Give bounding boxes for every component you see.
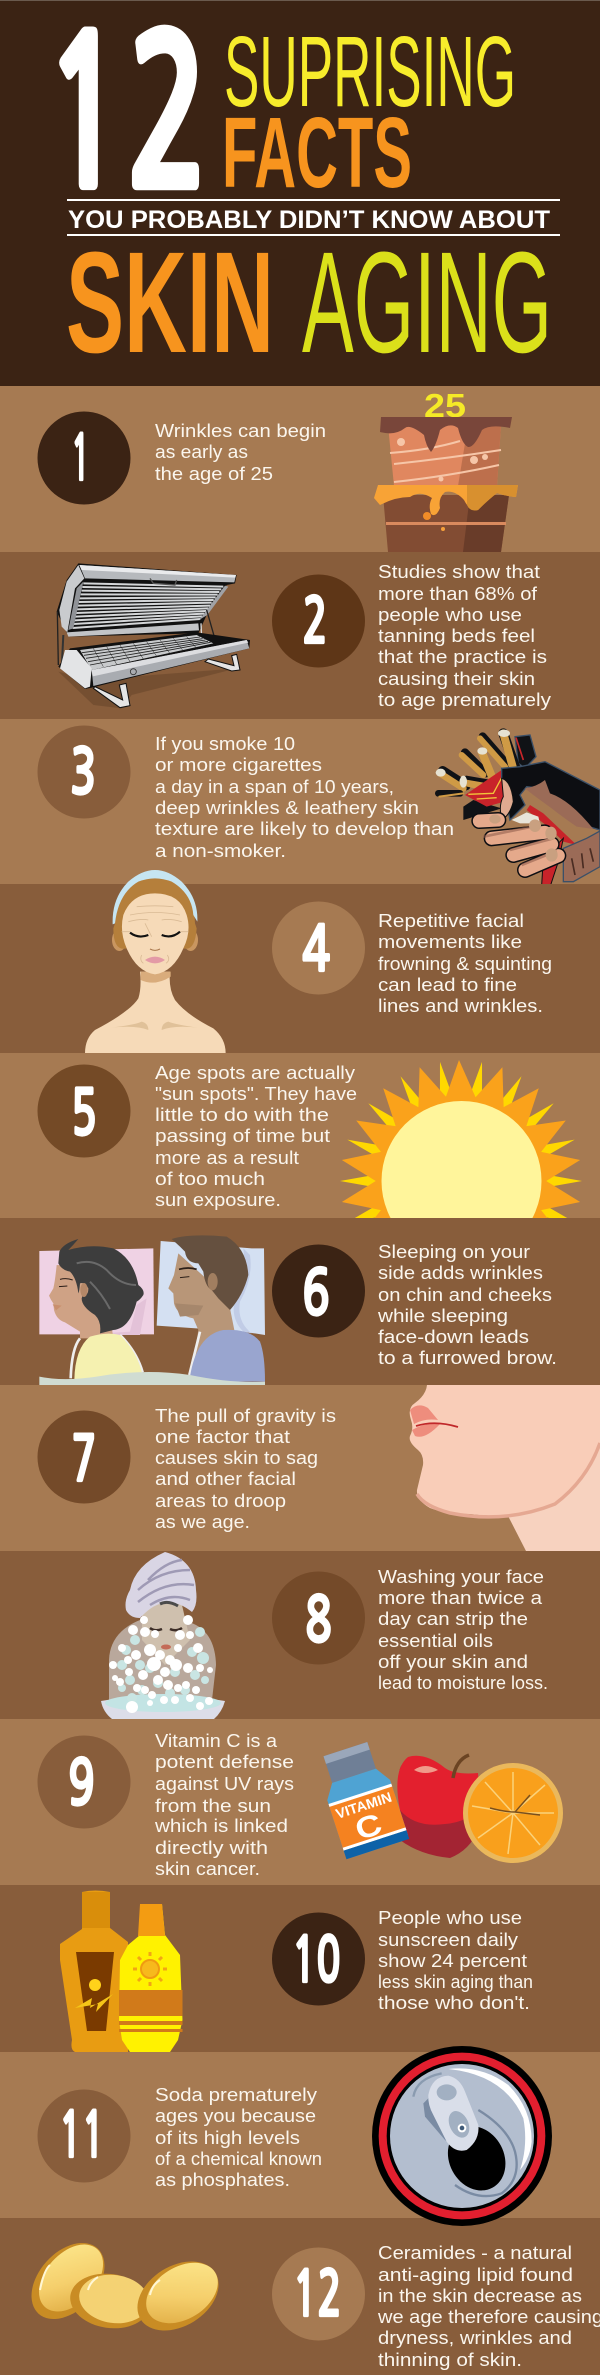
number badge 10 xyxy=(272,1912,365,2006)
number badge 12 xyxy=(272,2248,365,2340)
text: fact 10: People who use xyxy=(378,1907,522,1928)
text: fact 7: one factor that xyxy=(155,1426,290,1447)
illustration: woman washing face xyxy=(101,1552,225,1719)
number badge 7: 7 xyxy=(72,1430,96,1491)
text: fact 1: as early as xyxy=(155,441,248,462)
number badge 11: 11 xyxy=(59,2106,104,2167)
number badge 11 xyxy=(38,2090,130,2182)
number badge 1: 1 xyxy=(71,429,90,490)
text: fact 5: of too much xyxy=(155,1168,265,1189)
title word: facts: FACTS xyxy=(222,97,412,209)
icon: birthday cake: 25 xyxy=(424,387,466,424)
text: fact 11: Soda prematurely xyxy=(155,2084,318,2105)
text: fact 12: we age therefore causing xyxy=(377,2306,600,2327)
text: fact 4: Repetitive facial xyxy=(378,910,524,931)
number badge 5: 5 xyxy=(71,1084,97,1145)
text: fact 10: show 24 percent xyxy=(378,1950,527,1971)
text: fact 4 xyxy=(378,910,552,1016)
subtitle with rules: YOU PROBABLY DIDN’T KNOW ABOUT xyxy=(68,206,550,234)
text: fact 10 xyxy=(378,1907,533,2013)
panel: fact 6 xyxy=(0,1218,600,1385)
text: fact 2: Studies show that xyxy=(378,561,540,582)
text: fact 2: that the practice is xyxy=(378,646,547,667)
text: fact 9: skin cancer. xyxy=(155,1858,260,1879)
icon: vitamin c bottle, apple and orange: C xyxy=(351,1808,386,1847)
text: fact 6: face-down leads xyxy=(378,1326,529,1347)
icon: sun xyxy=(340,1060,582,1218)
text: fact 8: Washing your face xyxy=(378,1566,544,1587)
text: fact 3: texture are likely to develop than xyxy=(155,818,454,839)
title word: skin: SKIN xyxy=(66,222,274,383)
text: fact 9: potent defense xyxy=(155,1751,294,1772)
text: fact 8: off your skin and xyxy=(378,1651,528,1672)
number badge 2 xyxy=(272,574,365,668)
text: fact 1: Wrinkles can begin xyxy=(155,420,326,441)
panel: fact 3 xyxy=(0,719,600,885)
text: fact 11: of its high levels xyxy=(155,2127,300,2148)
text: fact 5: more as a result xyxy=(155,1147,299,1168)
text: fact 6: to a furrowed brow. xyxy=(378,1347,557,1368)
text: fact 8: more than twice a xyxy=(378,1587,543,1608)
number badge 8: 8 xyxy=(305,1591,332,1652)
illustration: face in profile xyxy=(410,1385,600,1551)
text: fact 12: in the skin decrease as xyxy=(378,2285,582,2306)
text: fact 11: of a chemical known xyxy=(155,2148,322,2169)
header xyxy=(0,0,600,386)
text: fact 6 xyxy=(377,1241,557,1368)
illustration: couple sleeping xyxy=(39,1235,265,1385)
number badge 4: 4 xyxy=(302,920,330,981)
number badge 6: 6 xyxy=(302,1264,330,1325)
panel: fact 9 xyxy=(0,1719,600,1885)
text: fact 2: causing their skin xyxy=(378,668,535,689)
text: fact 12: thinning of skin. xyxy=(378,2349,522,2370)
text: fact 12: anti-aging lipid found xyxy=(378,2264,573,2285)
text: fact 6: Sleeping on your xyxy=(378,1241,530,1262)
text: fact 2 xyxy=(378,561,552,710)
text: fact 1 xyxy=(155,420,326,484)
text: fact 5: sun exposure. xyxy=(155,1189,281,1210)
number badge 5 xyxy=(38,1064,130,1158)
icon: soda can top xyxy=(372,2046,552,2226)
panel: fact 1 xyxy=(0,386,600,552)
text: fact 8: essential oils xyxy=(378,1630,493,1651)
number badge 2: 2 xyxy=(302,592,328,653)
panel: fact 5 xyxy=(0,1053,600,1218)
icon: ceramide capsules xyxy=(17,2229,231,2345)
text: fact 3: a day in a span of 10 years, xyxy=(155,776,394,797)
icon: vitamin c bottle, apple and orange: VITAMIN xyxy=(334,1789,394,1822)
number badge 6 xyxy=(272,1244,365,1338)
text: fact 7 xyxy=(155,1405,336,1532)
text: fact 9: directly with xyxy=(155,1837,268,1858)
text: fact 6: on chin and cheeks xyxy=(378,1284,552,1305)
text: fact 11: as phosphates. xyxy=(155,2169,290,2190)
panel: fact 7 xyxy=(0,1385,600,1551)
text: fact 7: as we age. xyxy=(155,1511,250,1532)
text: fact 2: to age prematurely xyxy=(378,689,552,710)
text: fact 1: the age of 25 xyxy=(155,463,273,484)
text: fact 2: people who use xyxy=(378,604,522,625)
title number 12: 12 xyxy=(44,13,209,217)
number badge 3: 3 xyxy=(70,743,96,804)
number badge 10: 10 xyxy=(292,1931,341,1992)
text: fact 5: little to do with the xyxy=(155,1104,329,1125)
text: fact 2: tanning beds feel xyxy=(378,625,535,646)
text: fact 12 xyxy=(377,2242,600,2370)
illustration: woman with wrinkles xyxy=(85,870,226,1053)
text: fact 3: If you smoke 10 xyxy=(155,733,295,754)
number badge 1 xyxy=(38,412,130,504)
number badge 4 xyxy=(272,902,365,994)
text: fact 3: a non-smoker. xyxy=(155,840,286,861)
icon: sunscreen bottles xyxy=(60,1890,182,2052)
text: fact 9: against UV rays xyxy=(155,1773,294,1794)
panel: fact 4 xyxy=(0,870,600,1053)
text: fact 2: more than 68% of xyxy=(378,583,538,604)
text: fact 3: deep wrinkles & leathery skin xyxy=(155,797,419,818)
text: fact 11: ages you because xyxy=(155,2105,316,2126)
panel: fact 11 xyxy=(0,2046,600,2226)
text: fact 4: can lead to fine xyxy=(378,974,517,995)
text: fact 9: from the sun xyxy=(155,1795,271,1816)
text: fact 11 xyxy=(155,2084,322,2190)
number badge 9: 9 xyxy=(68,1754,95,1815)
text: fact 3 xyxy=(155,733,454,861)
text: fact 4: frowning & squinting xyxy=(378,953,552,974)
number badge 3 xyxy=(38,726,130,818)
text: fact 7: The pull of gravity is xyxy=(155,1405,336,1426)
icon: vitamin c bottle, apple and orange xyxy=(314,1739,563,1863)
number badge 12: 12 xyxy=(293,2265,342,2326)
icon: tanning bed xyxy=(57,563,250,708)
panel: fact 2 xyxy=(0,552,600,719)
panel: fact 12 xyxy=(0,2218,600,2375)
icon: fist crushing cigarettes xyxy=(436,730,600,885)
text: fact 12: Ceramides - a natural xyxy=(378,2242,572,2263)
text: fact 3: or more cigarettes xyxy=(155,754,322,775)
text: fact 6: while sleeping xyxy=(377,1305,508,1326)
panel: fact 8 xyxy=(0,1551,600,1719)
icon: birthday cake xyxy=(374,387,518,552)
text: fact 7: and other facial xyxy=(155,1468,296,1489)
text: fact 4: movements like xyxy=(378,931,522,952)
text: fact 9 xyxy=(154,1730,294,1879)
text: fact 7: areas to droop xyxy=(155,1490,286,1511)
panel: fact 10 xyxy=(0,1885,600,2052)
text: fact 5 xyxy=(155,1062,357,1210)
text: fact 5: passing of time but xyxy=(155,1125,330,1146)
text: fact 8: day can strip the xyxy=(378,1608,528,1629)
number badge 7 xyxy=(38,1410,130,1504)
text: fact 5: "sun spots". They have xyxy=(155,1083,357,1104)
text: fact 10: less skin aging than xyxy=(378,1971,533,1992)
text: fact 10: those who don't. xyxy=(378,1992,530,2013)
number badge 8 xyxy=(272,1572,365,1664)
text: fact 7: causes skin to sag xyxy=(155,1447,318,1468)
number badge 9 xyxy=(38,1736,130,1828)
text: fact 12: dryness, wrinkles and xyxy=(378,2327,572,2348)
text: fact 6: side adds wrinkles xyxy=(378,1262,543,1283)
text: fact 9: Vitamin C is a xyxy=(155,1730,278,1751)
text: fact 8 xyxy=(378,1566,548,1693)
text: fact 10: sunscreen daily xyxy=(378,1929,519,1950)
text: fact 9: which is linked xyxy=(154,1815,288,1836)
text: fact 4: lines and wrinkles. xyxy=(378,995,543,1016)
text: fact 5: Age spots are actually xyxy=(155,1062,356,1083)
text: fact 8: lead to moisture loss. xyxy=(378,1672,548,1693)
